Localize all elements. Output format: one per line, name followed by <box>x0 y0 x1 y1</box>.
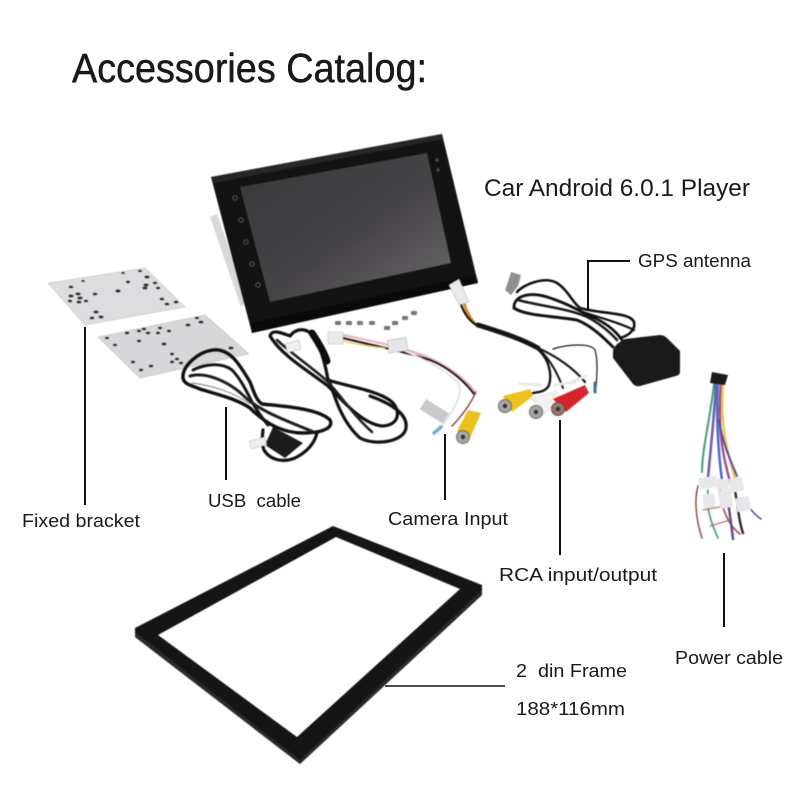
leader line: gps antenna <box>588 261 630 310</box>
screws <box>335 311 417 330</box>
white plug <box>328 332 343 344</box>
product: car android player <box>210 134 478 333</box>
product: usb cable <box>183 350 331 460</box>
white connector <box>285 340 301 353</box>
white fringe <box>520 376 586 385</box>
usb small white connector <box>249 437 267 449</box>
label: fixed bracket: Fixed bracket <box>22 510 140 531</box>
leader line: usb cable <box>225 407 227 480</box>
title: Accessories Catalog: <box>72 45 427 91</box>
red rca <box>553 385 589 412</box>
label: rca: RCA input/output <box>499 564 657 585</box>
product: rca harness <box>449 279 597 418</box>
leader line: frame <box>385 685 505 687</box>
label: usb cable: USB cable <box>208 490 301 511</box>
label: car android player: Car Android 6.0.1 Player <box>484 175 750 202</box>
yellow rca <box>457 410 481 438</box>
product: gps antenna <box>505 272 680 386</box>
leader line: rca <box>559 420 561 555</box>
grey tag <box>420 399 449 424</box>
screen <box>240 153 451 302</box>
white rca <box>532 391 560 415</box>
leader line: fixed bracket <box>84 327 86 505</box>
label: frame: 2 din Frame <box>516 660 627 681</box>
product: fixed brackets <box>48 268 249 378</box>
product: 2 din frame <box>135 526 482 764</box>
wiring plug <box>449 279 469 305</box>
blue pin <box>434 427 441 433</box>
product: camera input harness <box>328 332 481 444</box>
white connectors <box>698 476 751 512</box>
product: coiled lead <box>270 330 406 442</box>
bracket plate two <box>98 315 249 378</box>
side buttons <box>233 159 439 287</box>
bracket plate one <box>48 268 185 325</box>
product: power cable <box>696 372 761 539</box>
leader line: power cable <box>723 553 725 627</box>
label sleeve <box>387 338 408 353</box>
antenna connector <box>505 272 521 295</box>
usb plug <box>265 427 303 458</box>
leader line: camera input <box>444 434 446 500</box>
label: power cable: Power cable <box>675 647 783 668</box>
label: frame size: 188*116mm <box>516 698 625 719</box>
label: gps antenna: GPS antenna <box>638 250 752 271</box>
label: camera input: Camera Input <box>388 508 508 529</box>
black plug <box>710 372 728 385</box>
yellow rca <box>503 389 533 412</box>
gps puck <box>613 335 680 386</box>
